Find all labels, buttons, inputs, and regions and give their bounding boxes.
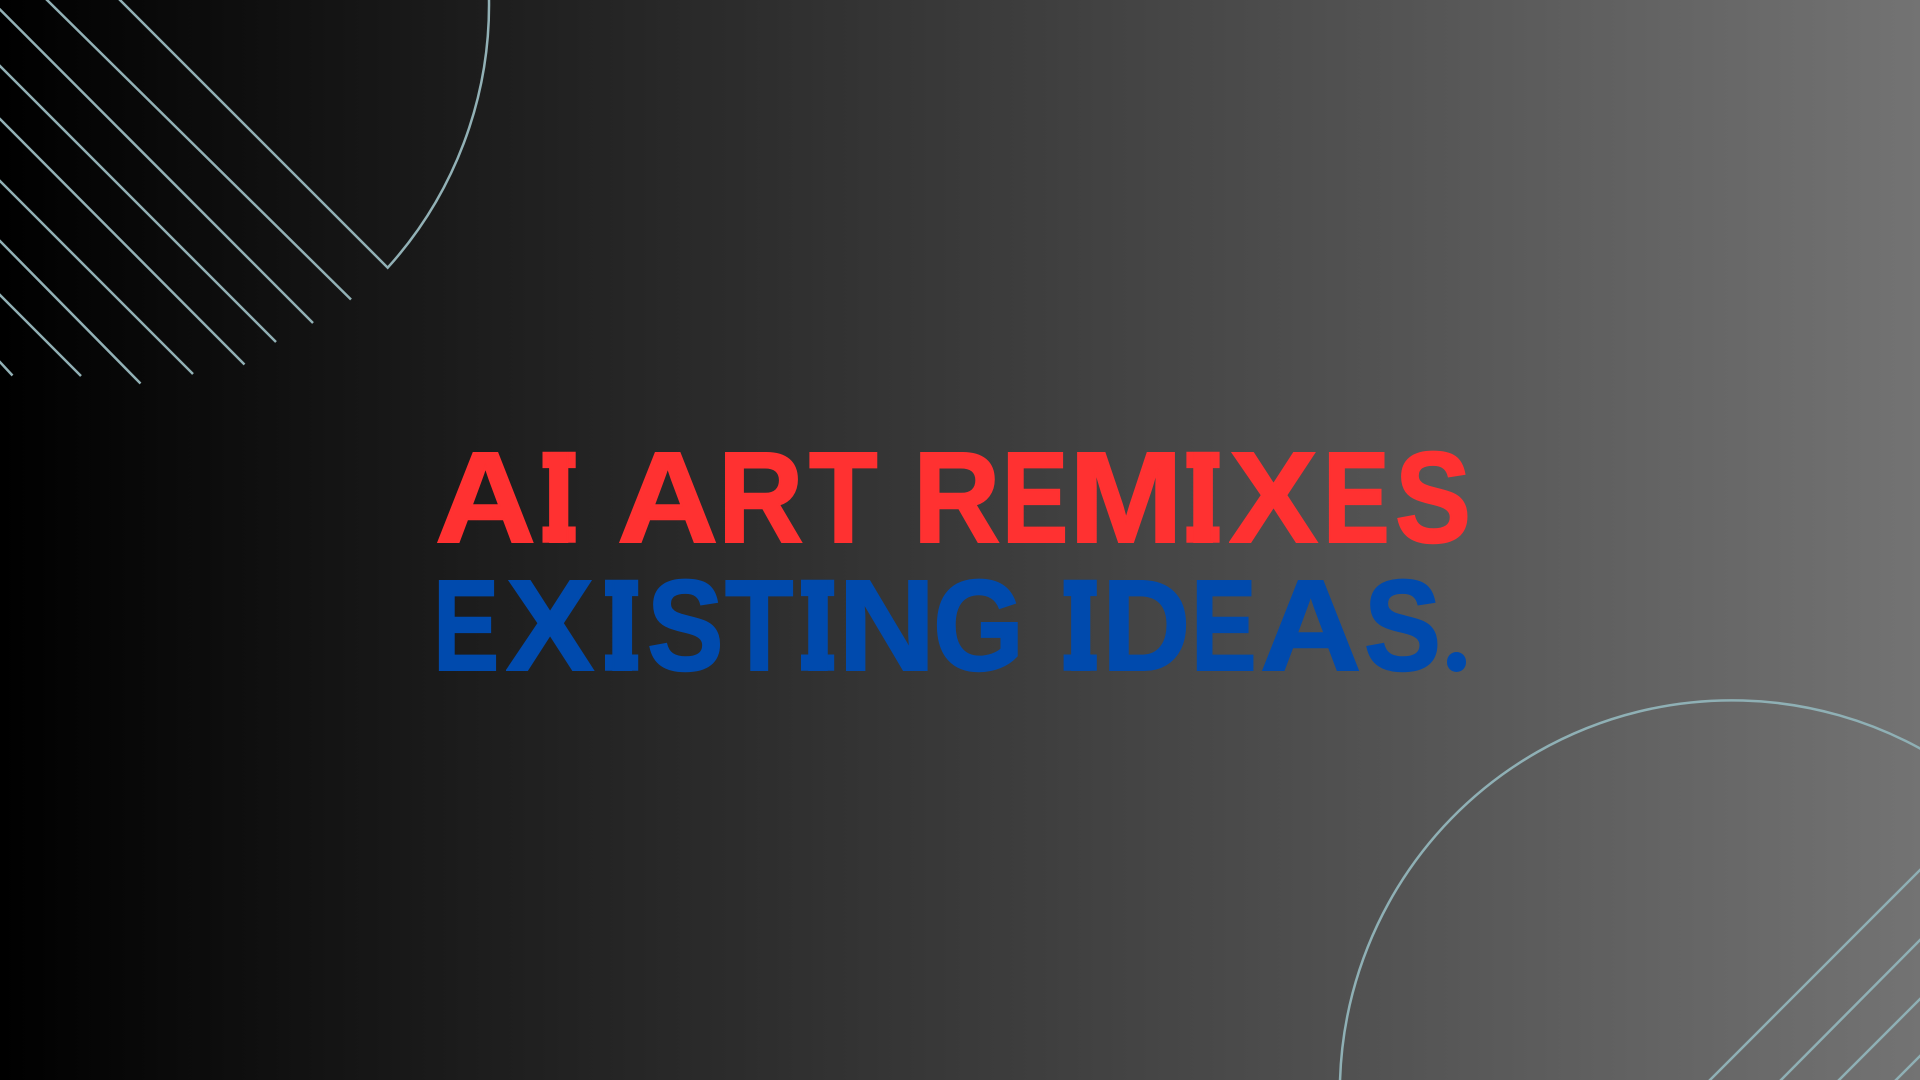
title line 2: blue: . xyxy=(1455,652,1458,666)
title line 2: blue: N xyxy=(838,554,935,698)
title line 2: blue xyxy=(433,554,1466,698)
title line 2: blue: T xyxy=(725,554,793,698)
title line 2: blue: I xyxy=(1064,554,1097,698)
title line 1: red: M xyxy=(1069,426,1183,570)
title xyxy=(433,426,1471,698)
title line 2: blue: I xyxy=(801,554,835,698)
title line 1: red: R xyxy=(718,426,804,570)
title line 1: red: E xyxy=(1002,426,1068,570)
title line 2: blue: E xyxy=(1191,554,1256,698)
title line 2: blue: D xyxy=(1102,554,1190,698)
title line 1: red: X xyxy=(1229,426,1317,570)
title line 1: red: S xyxy=(1395,426,1471,570)
title line 2: blue: S xyxy=(1364,554,1441,698)
title line 2: blue: A xyxy=(1260,554,1361,698)
title line 1: red: E xyxy=(1323,426,1390,570)
title line 1: red: I xyxy=(542,426,576,570)
title line 1: red xyxy=(435,426,1471,570)
title line 2: blue: X xyxy=(506,554,594,698)
title line 1: red: T xyxy=(809,426,877,570)
title line 2: blue: E xyxy=(433,554,499,698)
title line 1: red: A xyxy=(435,426,536,570)
title line 2: blue: S xyxy=(647,554,723,698)
title line 2: blue: G xyxy=(933,554,1024,698)
title line 1: red: I xyxy=(1186,426,1220,570)
decoration: top-left arc and diagonal lines xyxy=(0,0,490,384)
title line 1: red: R xyxy=(913,426,1001,570)
decoration: bottom-right arc and diagonal lines xyxy=(1338,699,1920,1080)
title line 1: red: A xyxy=(617,426,719,570)
title line 2: blue: I xyxy=(605,554,639,698)
